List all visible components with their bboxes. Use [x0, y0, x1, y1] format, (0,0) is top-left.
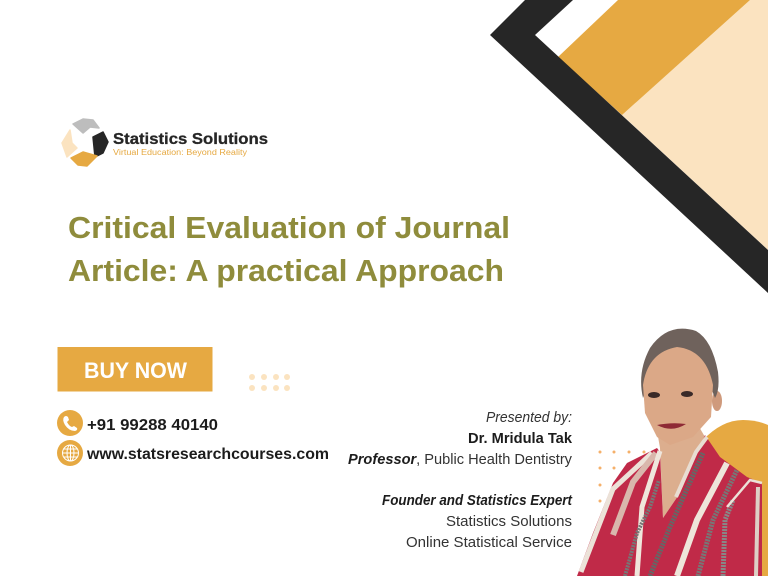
phone contact: [57, 410, 218, 436]
logo: [62, 119, 268, 166]
presenter details: [348, 409, 573, 551]
orange dots: [598, 450, 646, 502]
neck and chest: [656, 425, 705, 518]
website contact: [57, 440, 329, 466]
face: [643, 347, 713, 445]
presenter details: Online Statistical Service: [406, 534, 572, 551]
presenter details: Statistics Solutions: [446, 513, 572, 530]
blouse: [577, 435, 762, 576]
title: Article: A practical Approach: [68, 253, 504, 288]
icon: globe: [57, 440, 83, 466]
ear: [712, 391, 722, 411]
decorative dots: [249, 374, 290, 391]
presenter details: Founder and Statistics Expert: [382, 492, 573, 509]
corner graphic: layered diagonal shapes: [490, 0, 768, 293]
buy now button: [58, 347, 212, 392]
hair: [641, 329, 719, 398]
presenter details: Dr. Mridula Tak: [468, 430, 573, 447]
presenter portrait: [577, 329, 762, 576]
website url: www.statsresearchcourses.com: [86, 446, 329, 463]
logo mark: [62, 119, 108, 166]
presenter details: Professor, Public Health Dentistry: [348, 451, 572, 468]
eyes and mouth: [648, 391, 693, 429]
logo name: Statistics Solutions: [113, 131, 268, 148]
logo tagline: Virtual Education: Beyond Reality: [113, 148, 247, 157]
buy now button: BUY NOW: [84, 358, 187, 383]
title: [68, 210, 510, 288]
blouse stripes: [581, 437, 762, 576]
title: Critical Evaluation of Journal: [68, 210, 510, 245]
icon: phone: [57, 410, 83, 436]
presenter details: Presented by:: [486, 409, 572, 426]
gold backing shape: [703, 420, 768, 576]
phone number: +91 99288 40140: [87, 417, 218, 434]
